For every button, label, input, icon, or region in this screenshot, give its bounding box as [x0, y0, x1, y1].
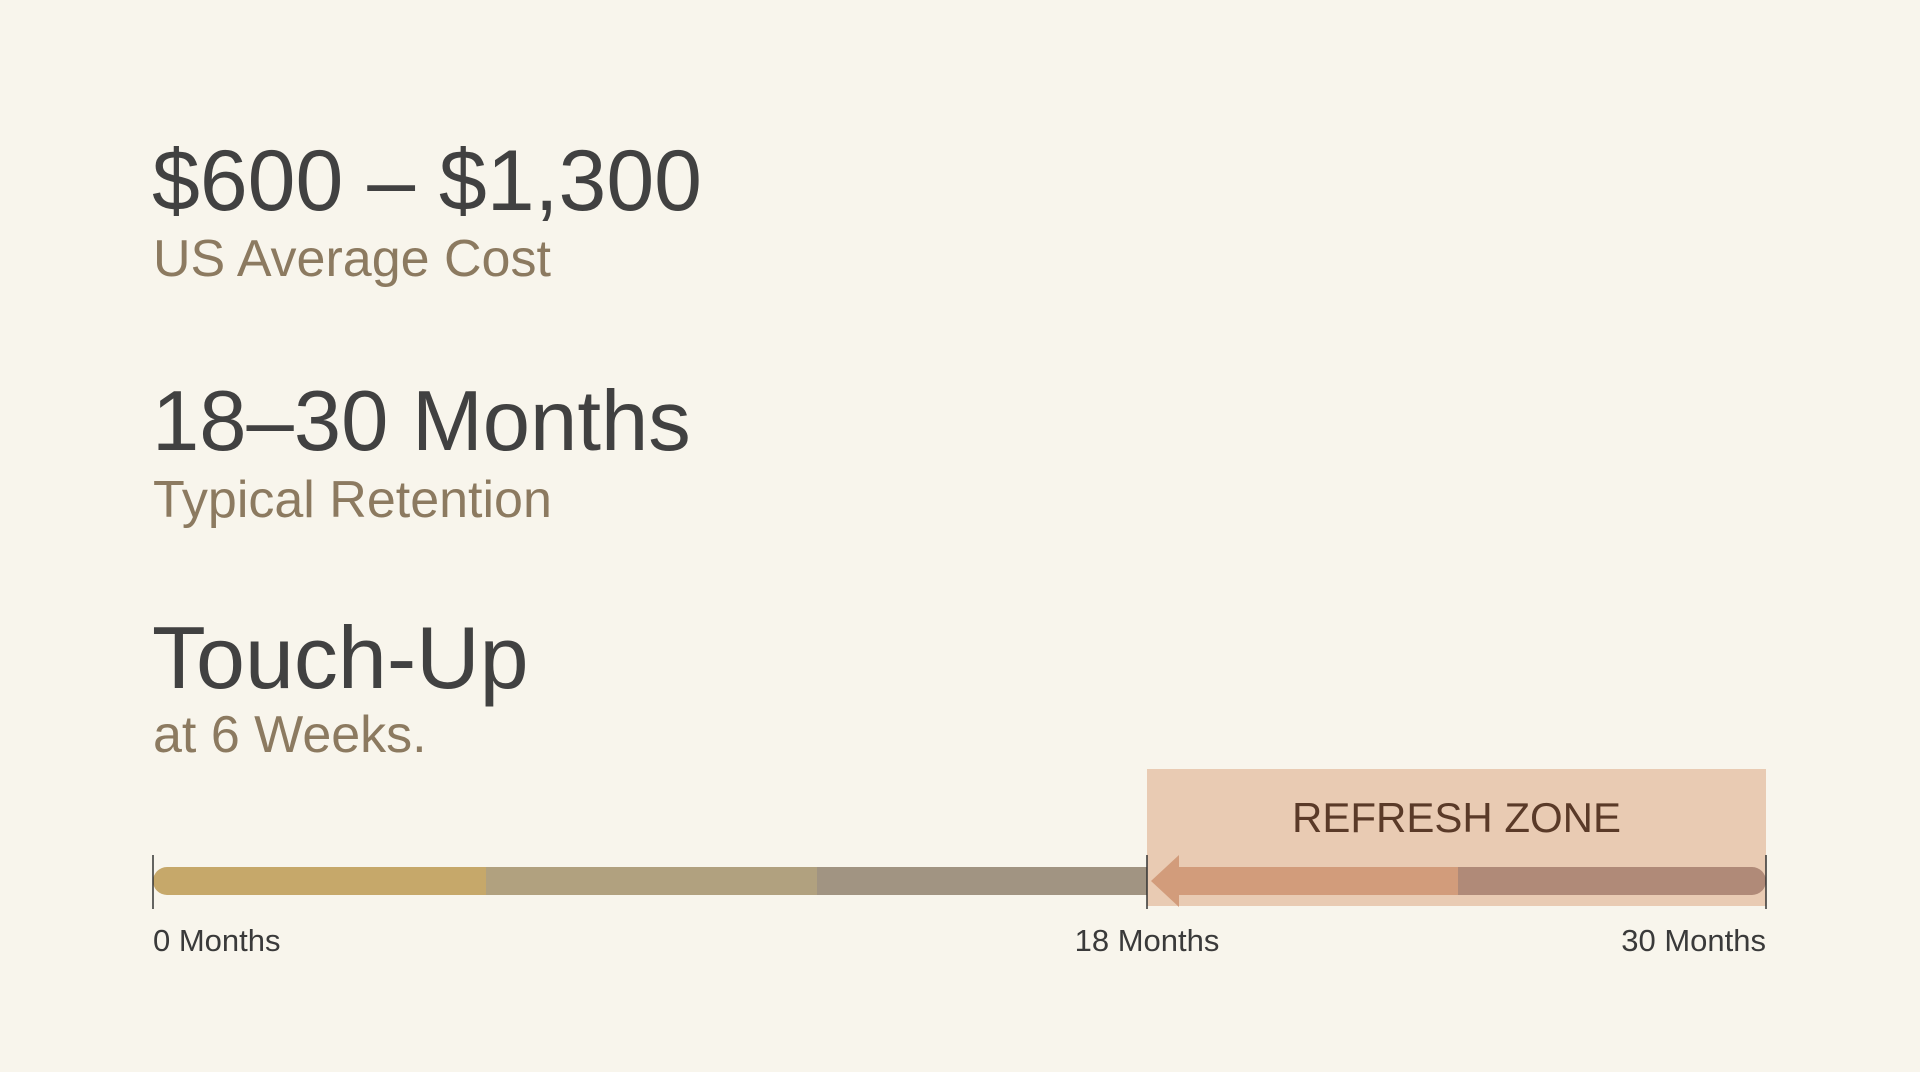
axis label: 30 months: 30 Months: [1621, 923, 1766, 958]
refresh zone box: [1147, 769, 1766, 906]
axis label: 18 months: 18 Months: [1075, 923, 1219, 958]
subtitle: cost: US Average Cost: [153, 230, 551, 288]
tick marks: [153, 855, 1766, 909]
title: cost: $600 – $1,300: [152, 133, 702, 229]
title: touch-up: Touch-Up: [152, 608, 529, 707]
timeline bar: [153, 867, 1766, 895]
title: retention: 18–30 Months: [152, 374, 691, 469]
subtitle: retention: Typical Retention: [153, 471, 552, 529]
arrow head: [1151, 855, 1179, 907]
subtitle: touch-up: at 6 Weeks.: [153, 706, 427, 764]
refresh zone label: REFRESH ZONE: [1292, 794, 1621, 841]
axis label: 0 months: 0 Months: [153, 923, 281, 958]
